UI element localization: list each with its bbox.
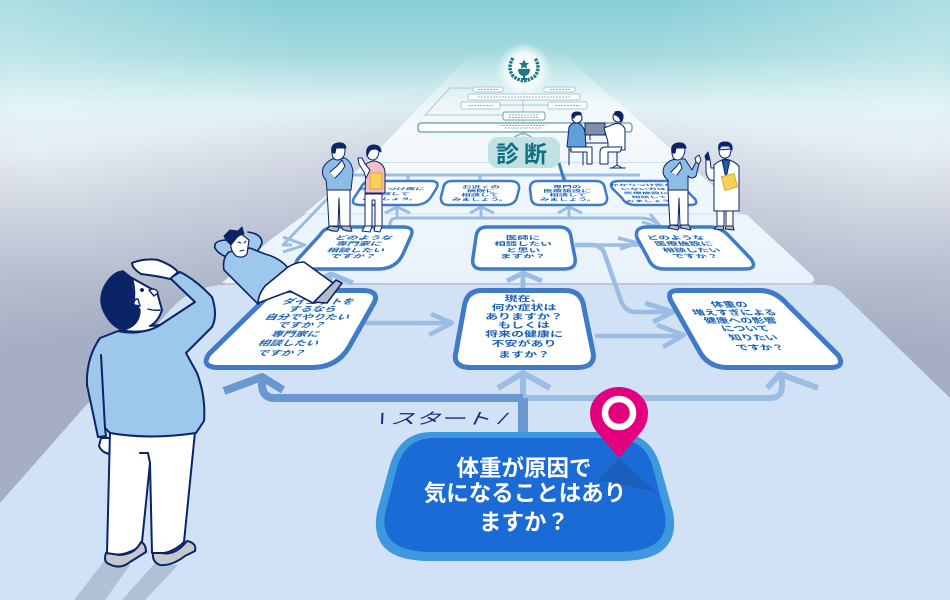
card: which medical facility: 相談したい <box>660 247 723 253</box>
card: row 3 second: 病院に <box>467 189 495 193</box>
card: want to consult a doctor: ますか？ <box>500 253 546 259</box>
card: row 3 third: 医療施設に <box>543 189 591 193</box>
card: which specialist: どのような <box>334 234 395 241</box>
card: row 3 second: お近くの <box>462 185 500 189</box>
flow arrows: upper level <box>283 175 662 288</box>
card: current symptoms: 現在、 <box>505 294 543 303</box>
flow lines <box>425 88 548 137</box>
person: main figure <box>87 259 215 567</box>
card: row 3 third <box>530 181 607 205</box>
middle plane <box>222 163 814 283</box>
card: which medical facility: どのような <box>644 234 707 241</box>
card: effects of weight gain: 体重の <box>708 300 750 309</box>
card: which specialist: 相談したい <box>326 247 387 253</box>
start question: ますか？ <box>479 510 569 535</box>
connector from diagnosis <box>559 163 564 180</box>
icon: location pin <box>590 387 648 458</box>
card: effects of weight gain: ですか？ <box>734 344 787 352</box>
card: which specialist: ですか？ <box>328 253 378 259</box>
card: row 3 far left: かかりつけ医に <box>357 187 426 191</box>
flow arrows: lower level <box>224 245 818 434</box>
card: row 3 far right <box>609 181 696 205</box>
card: row 3 second: 相談して <box>461 193 499 197</box>
card: effects of weight gain: 健康への影響 <box>701 316 780 325</box>
card: row 3 far right: 相談して <box>630 195 668 199</box>
icon: trophy emblem <box>497 42 551 96</box>
card: current symptoms: もしくは <box>498 321 550 330</box>
start question: 気になることはあり <box>424 481 626 506</box>
pin shadow <box>597 458 656 492</box>
card: row 3 second: みましょう。 <box>452 197 508 201</box>
card: diet: ですか？ <box>275 321 329 330</box>
card: want to consult a doctor: と思い <box>506 247 540 253</box>
consultation scene <box>567 111 625 168</box>
card: row 3 far left: みましょう。 <box>361 197 420 201</box>
card: effects of weight gain: について <box>719 325 772 333</box>
card: row 3 far left: 相談して <box>371 192 411 196</box>
card: diet: 自分でやりたい <box>263 313 353 322</box>
card: row 3 far right: みましょう。 <box>624 199 680 203</box>
person: man 1 <box>322 143 353 231</box>
card: which medical facility: ですか？ <box>670 253 721 259</box>
diagnosis label: 診断 <box>496 141 552 167</box>
card: row 3 far left <box>353 181 438 205</box>
person: man 2 <box>663 143 701 230</box>
person: doctor <box>705 142 739 230</box>
lower floor plane <box>0 285 950 600</box>
person: nurse <box>358 145 385 232</box>
card: row 3 third: 相談して <box>549 193 587 197</box>
top chart <box>418 87 632 137</box>
card: want to consult a doctor: 相談したい <box>494 240 552 247</box>
card: effects of weight gain: 増えすぎによる <box>690 308 779 317</box>
person: lying man <box>215 227 342 304</box>
card: want to consult a doctor <box>473 227 575 269</box>
card: want to consult a doctor: 医師に <box>506 234 540 241</box>
shadows of main person <box>74 560 130 600</box>
card: which specialist: 専門家に <box>334 240 384 247</box>
card: current symptoms: ありますか？ <box>485 313 563 321</box>
card: effects of weight gain: 知りたい <box>726 333 780 342</box>
card: row 3 third: みましょう。 <box>540 197 596 201</box>
card: diet <box>206 290 376 368</box>
start label: \ スタート / <box>374 410 511 428</box>
diagnosis button <box>488 137 560 168</box>
card: diet: 専門家に <box>269 330 323 339</box>
card: row 3 third: 専門の <box>553 185 581 189</box>
card: row 3 far right: かかりつけ医が <box>609 183 674 187</box>
card: row 3 far right: いない方は <box>620 187 667 191</box>
card: diet: 相談したい <box>256 339 322 348</box>
card: diet: するなら <box>286 305 340 314</box>
card: row 3 second <box>441 181 519 205</box>
card: which medical facility: 医療施設に <box>652 240 715 247</box>
card: diet: ですか？ <box>255 349 309 358</box>
card: current symptoms: 不安があり <box>492 339 556 348</box>
card: effects of weight gain <box>670 290 841 368</box>
card: current symptoms: 将来の健康に <box>485 329 563 339</box>
arrow to diagnosis <box>514 133 532 137</box>
plane edges <box>225 162 815 284</box>
card: row 3 far right: 医療施設に <box>623 191 670 195</box>
card: which specialist <box>296 227 412 269</box>
start question <box>424 455 626 535</box>
top plane: diagnosis <box>366 54 687 163</box>
card: current symptoms: 何か症状は <box>492 303 557 312</box>
card: which medical facility <box>636 227 753 269</box>
card: current symptoms: ますか？ <box>498 351 550 359</box>
card: diet: ダイエットを <box>280 297 358 306</box>
start question: 体重が原因で <box>456 455 592 481</box>
start box <box>376 432 674 561</box>
card: current symptoms <box>455 290 593 368</box>
